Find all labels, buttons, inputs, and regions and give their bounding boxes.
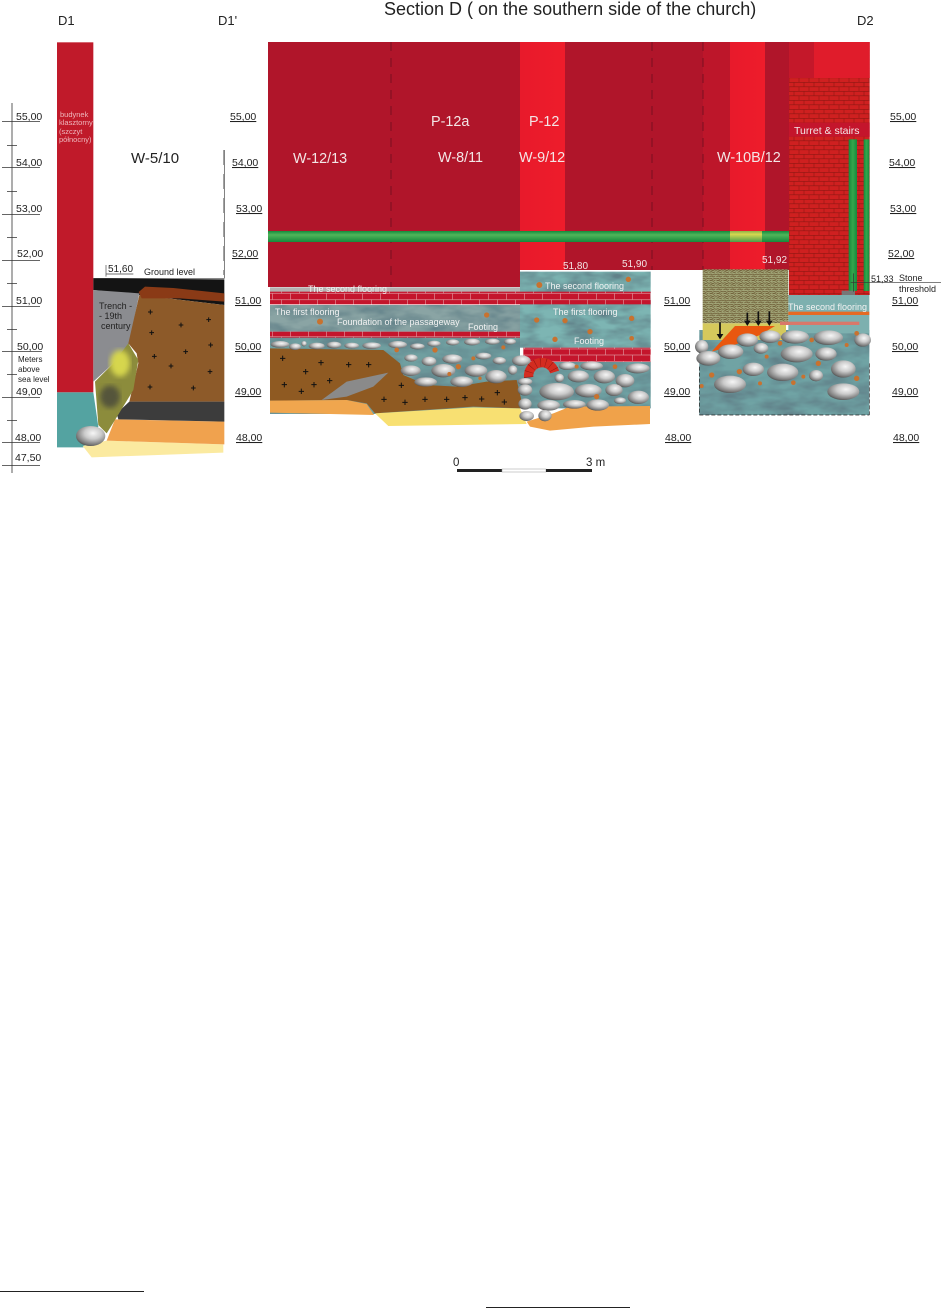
panel: right strata and turret: Turret & stairs: [794, 125, 860, 137]
panel: red wall elevation: P-12a: [431, 114, 469, 130]
red brick arch: [529, 363, 555, 377]
elevation labels: right: 55,00: [890, 111, 916, 123]
elevation labels: centre right: 48,00: [665, 432, 691, 444]
panel: section W-5/10: - 19th: [99, 311, 122, 321]
panel: section W-5/10: century: [101, 321, 131, 331]
elevation scale: left: [2, 103, 50, 473]
elevation labels: right: 51,00: [892, 295, 918, 307]
elevation scale: left: 53,00: [16, 203, 42, 215]
elevation labels: centre right: 50,00: [664, 341, 690, 353]
section marker D1: D1: [58, 13, 75, 28]
panel: right strata and turret: threshold: [899, 284, 936, 294]
panel: section W-5/10: 51,60: [108, 264, 133, 275]
elevation labels: centre right: [664, 295, 691, 444]
elevation labels: centre left: 52,00: [232, 248, 258, 260]
panel: red wall elevation: W-12/13: [293, 151, 347, 167]
elevation scale: left: 52,00: [17, 248, 43, 260]
panel: section W-5/10: budynek: [60, 110, 89, 119]
panel: red wall elevation: 51,90: [622, 259, 647, 270]
panel: red wall elevation: 51,80: [563, 261, 588, 272]
elevation labels: centre left: [230, 111, 262, 444]
elevation labels: right: 50,00: [892, 341, 918, 353]
elevation scale: left: 51,00: [16, 295, 42, 307]
elevation labels: right: 52,00: [888, 248, 914, 260]
elevation scale: left: Meters: [18, 355, 42, 364]
panel: red wall elevation: W-8/11: [438, 150, 483, 166]
panel: red wall elevation: [268, 42, 789, 287]
elevation labels: right: 49,00: [892, 386, 918, 398]
elevation scale: left: above: [18, 365, 40, 374]
section marker D1': D1': [218, 13, 237, 28]
elevation labels: right: 53,00: [890, 203, 916, 215]
panel: section W-5/10: północny): [59, 135, 92, 144]
panel: right strata and turret: [695, 42, 941, 415]
panel: lower strata centre: The second flooring: [545, 281, 624, 291]
elevation labels: centre right: 49,00: [664, 386, 690, 398]
panel: lower strata centre: [270, 272, 651, 431]
panel: section W-5/10: Ground level: [144, 267, 195, 277]
panel: section W-5/10: W-5/10: [131, 150, 179, 167]
scale bar: 0: [453, 457, 459, 469]
panel: lower strata centre: Footing: [468, 322, 498, 332]
elevation labels: centre left: 49,00: [235, 386, 261, 398]
elevation scale: left: 49,00: [16, 386, 42, 398]
elevation labels: centre left: 51,00: [235, 295, 261, 307]
green band: [268, 231, 789, 242]
section marker D2: D2: [857, 13, 874, 28]
panel: right strata and turret: Stone: [899, 273, 923, 283]
elevation labels: centre left: 55,00: [230, 111, 256, 123]
panel: red wall elevation: P-12: [529, 114, 559, 130]
scale bar: [453, 457, 605, 472]
panel: lower strata centre: Footing: [574, 336, 604, 346]
panel: red wall elevation: 51,92: [762, 255, 787, 266]
panel: lower strata centre: The second flooring: [308, 284, 387, 294]
elevation labels: right: [888, 111, 919, 444]
elevation scale: left: 48,00: [15, 432, 41, 444]
elevation labels: centre left: 50,00: [235, 341, 261, 353]
panel: red wall elevation: W-9/12: [519, 150, 565, 166]
elevation labels: right: 54,00: [889, 157, 915, 169]
elevation scale: left: 50,00: [17, 341, 43, 353]
panel: section W-5/10: [57, 42, 224, 457]
panel: red wall elevation: W-10B/12: [717, 150, 781, 166]
elevation scale: left: sea level: [18, 375, 50, 384]
elevation scale: left: 47,50: [15, 452, 41, 464]
elevation labels: centre right: 51,00: [664, 295, 690, 307]
elevation scale: left: 55,00: [16, 111, 42, 123]
elevation labels: centre left: 53,00: [236, 203, 262, 215]
panel: section W-5/10: klasztorny: [59, 118, 93, 127]
elevation labels: centre left: 54,00: [232, 157, 258, 169]
panel: right strata and turret: 51,33: [871, 274, 894, 284]
panel: right strata and turret: The second flooring: [788, 302, 867, 312]
panel: lower strata centre: Foundation of the passageway: [337, 317, 460, 327]
panel: section W-5/10: Trench -: [99, 301, 132, 311]
panel: lower strata centre: The first flooring: [275, 307, 340, 317]
panel: section W-5/10: (szczyt: [59, 127, 83, 136]
elevation labels: centre left: 48,00: [236, 432, 262, 444]
elevation scale: left: 54,00: [16, 157, 42, 169]
panel: lower strata centre: The first flooring: [553, 307, 618, 317]
scale bar: 3 m: [586, 457, 605, 469]
elevation labels: right: 48,00: [893, 432, 919, 444]
turret and stairs: [789, 42, 870, 295]
